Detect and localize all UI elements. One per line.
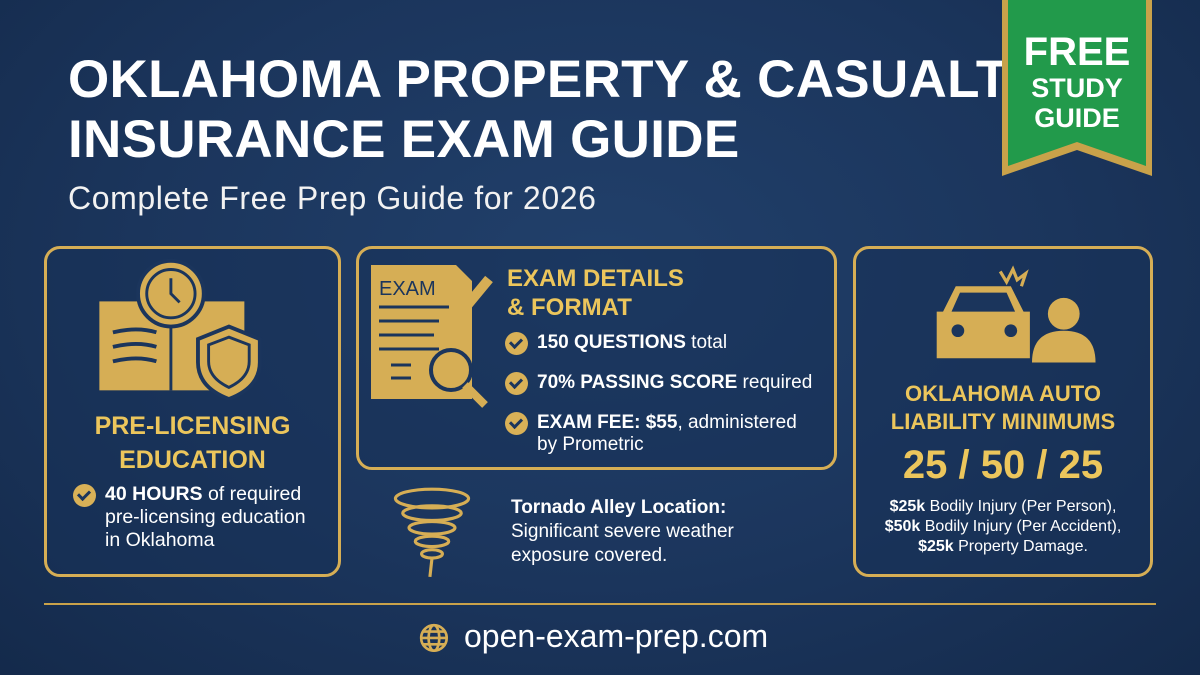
heading: & FORMAT bbox=[507, 294, 632, 321]
icon: car and person bbox=[936, 266, 1096, 362]
panel: exam details bbox=[356, 246, 837, 470]
heading bbox=[95, 412, 290, 474]
ribbon: free study guide: GUIDE bbox=[1034, 103, 1120, 133]
subtitle: Complete Free Prep Guide for 2026 bbox=[68, 180, 597, 216]
icon: exam paper bbox=[371, 265, 493, 408]
title: OKLAHOMA PROPERTY & CASUALTY bbox=[68, 50, 1044, 109]
heading bbox=[891, 381, 1115, 434]
list bbox=[505, 332, 812, 455]
text block: pre-licensing education bbox=[105, 506, 306, 528]
title: INSURANCE EXAM GUIDE bbox=[68, 110, 740, 169]
ribbon: free study guide bbox=[1002, 0, 1152, 176]
heading: EDUCATION bbox=[119, 446, 266, 474]
footer: website: open-exam-prep.com bbox=[464, 618, 768, 654]
text block: tornado alley: Tornado Alley Location: bbox=[511, 497, 726, 518]
text block: $25k Bodily Injury (Per Person), bbox=[890, 498, 1116, 515]
heading: LIABILITY MINIMUMS bbox=[891, 409, 1115, 434]
title bbox=[68, 50, 1044, 169]
heading: OKLAHOMA AUTO bbox=[905, 381, 1101, 406]
text block: in Oklahoma bbox=[105, 529, 214, 551]
list: EXAM FEE: $55, administered bbox=[537, 412, 797, 433]
text block: 40 HOURS of required bbox=[105, 483, 301, 505]
heading: PRE-LICENSING bbox=[95, 412, 290, 440]
heading: EXAM DETAILS bbox=[507, 265, 684, 292]
list: 150 QUESTIONS total bbox=[537, 332, 727, 353]
icon: exam paper: EXAM bbox=[379, 278, 436, 300]
text block bbox=[885, 498, 1121, 555]
panel: pre-licensing education bbox=[44, 246, 341, 577]
text block: tornado alley: Significant severe weather bbox=[511, 521, 734, 542]
icon: book with clock and shield bbox=[99, 262, 258, 397]
icon: globe bbox=[420, 624, 448, 652]
text block: $50k Bodily Injury (Per Accident), bbox=[885, 518, 1121, 535]
icon: tornado bbox=[394, 488, 470, 577]
list: 70% PASSING SCORE required bbox=[537, 372, 812, 393]
heading bbox=[507, 265, 684, 321]
big number: 25 / 50 / 25 bbox=[903, 443, 1103, 487]
text block bbox=[73, 483, 306, 551]
text block: $25k Property Damage. bbox=[918, 538, 1088, 555]
ribbon: free study guide: STUDY bbox=[1031, 73, 1123, 103]
panel: auto liability bbox=[853, 246, 1153, 577]
text block: tornado alley bbox=[511, 497, 734, 566]
list: by Prometric bbox=[537, 434, 644, 455]
text block: tornado alley: exposure covered. bbox=[511, 545, 667, 566]
ribbon: free study guide: FREE bbox=[1024, 30, 1130, 74]
